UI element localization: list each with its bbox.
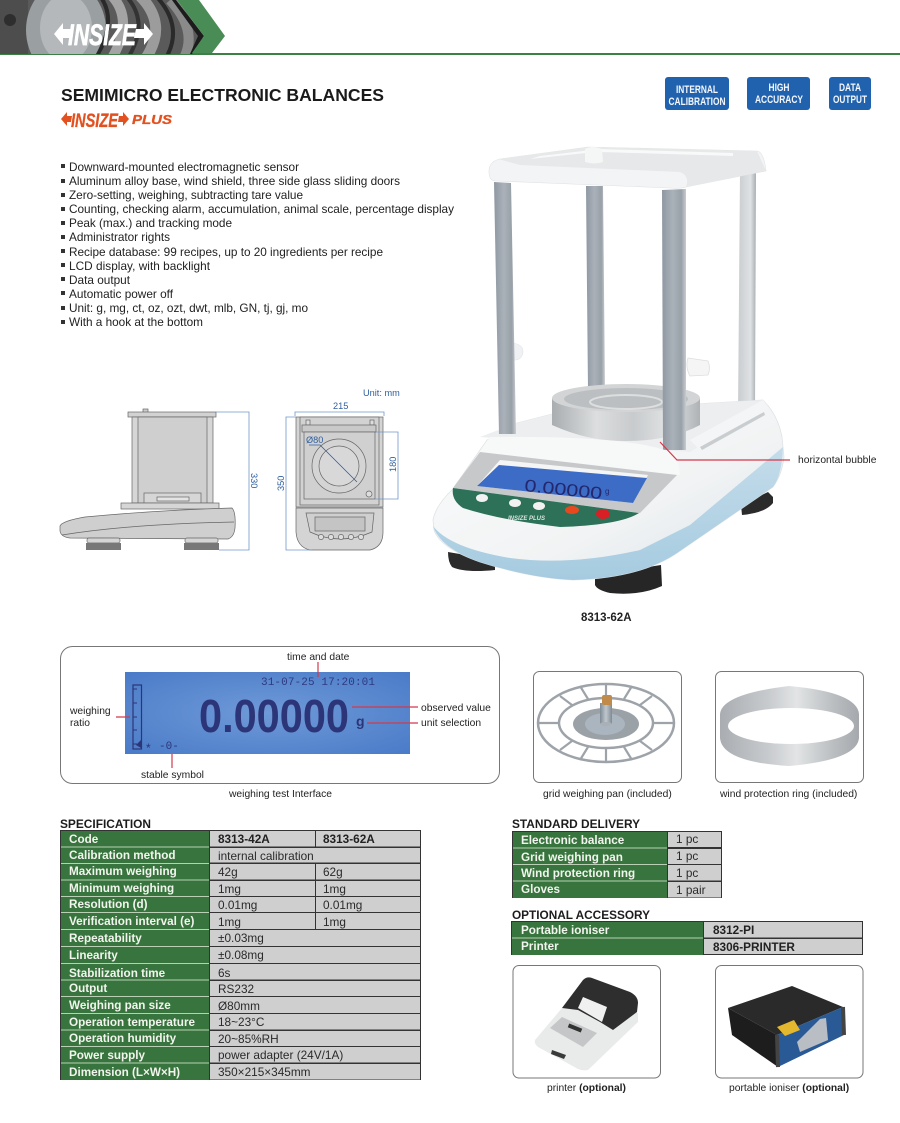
brand logo: INSIZE PLUS [61, 111, 173, 132]
feature list: With a hook at the bottom [69, 315, 203, 329]
table: specification: Operation temperature [69, 1016, 195, 1029]
balance control panel: 0.00000 [524, 476, 603, 503]
table: specification: Code [69, 833, 99, 846]
balance control panel: g [605, 487, 609, 496]
table: specification: 1mg [323, 882, 346, 896]
panel: weighing test interface [60, 646, 500, 784]
LCD screen [125, 672, 410, 755]
interface callouts: time and date [287, 652, 350, 663]
LCD screen: -0- [159, 741, 179, 753]
balance windshield ring [552, 384, 700, 441]
balance control panel [453, 452, 677, 527]
icon: ioniser [728, 986, 844, 1067]
table: specification: power adapter (24V/1A) [218, 1048, 343, 1062]
table: specification: Resolution (d) [69, 898, 148, 911]
panel: wind protection ring [716, 672, 864, 782]
badge: internal calibration [665, 77, 729, 110]
balance base body [433, 182, 784, 594]
caption: grid pan: grid weighing pan (included) [543, 789, 672, 800]
feature list: Unit: g, mg, ct, oz, ozt, dwt, mlb, GN, tj, gj, mo [69, 301, 308, 315]
table: specification: Verification interval (e) [69, 915, 194, 928]
table: specification: internal calibration [218, 849, 314, 863]
icon: ring [720, 686, 859, 766]
feature list: Recipe database: 99 recipes, up to 20 ingredients per recipe [69, 245, 383, 259]
table: standard delivery: 1 pc [676, 832, 698, 846]
interface callouts: ratio [70, 718, 90, 729]
badge: internal calibration: CALIBRATION [668, 96, 726, 108]
heading: specification: SPECIFICATION [60, 817, 151, 831]
product photo: balance 8313-62A [433, 147, 784, 594]
feature list: Peak (max.) and tracking mode [69, 216, 232, 230]
heading: standard delivery: STANDARD DELIVERY [512, 817, 640, 831]
brand logo: INSIZE PLUS: INSIZE [71, 111, 119, 132]
table: specification: Operation humidity [69, 1032, 177, 1045]
dimension lines and labels: Ø80 [306, 435, 323, 445]
table: optional accessory: Printer [521, 940, 559, 953]
brand logo: INSIZE PLUS: PLUS [132, 113, 173, 127]
badge: internal calibration: INTERNAL [676, 84, 718, 96]
feature list: Downward-mounted electromagnetic sensor [69, 160, 299, 174]
header machinery photo [0, 0, 204, 54]
table: specification: Stabilization time [69, 967, 166, 980]
technical drawing: side view [60, 409, 235, 550]
table: specification: RS232 [218, 982, 254, 996]
table: specification: Power supply [69, 1049, 145, 1062]
dimension lines and labels: 330 [249, 473, 259, 488]
LCD screen: g [356, 713, 365, 729]
table: optional accessory: Portable ioniser [521, 924, 610, 937]
table: specification: 0.01mg [323, 898, 362, 912]
table: specification: Calibration method [69, 849, 176, 862]
table: specification: 8313-62A [323, 832, 375, 846]
balance rear posts [586, 170, 756, 415]
header banner [0, 0, 900, 55]
table: standard delivery: 1 pc [676, 866, 698, 880]
table: standard delivery: 1 pair [676, 883, 706, 897]
table: specification [60, 830, 421, 1080]
table: specification: Dimension (L×W×H) [69, 1066, 180, 1079]
feature list: Counting, checking alarm, accumulation, animal scale, percentage display [69, 202, 454, 216]
table: optional accessory: 8312-PI [713, 923, 754, 937]
balance glass door handles [512, 343, 710, 376]
table: optional accessory: 8306-PRINTER [713, 940, 795, 954]
title: SEMIMICRO ELECTRONIC BALANCES [61, 85, 384, 105]
feature list: Zero-setting, weighing, subtracting tare value [69, 188, 303, 202]
balance front posts [494, 182, 686, 450]
table: specification: Linearity [69, 949, 118, 962]
balance top frame [489, 147, 766, 188]
dimension lines and labels: 215 [333, 401, 348, 411]
LCD screen: 0.00000 [199, 690, 349, 742]
table: specification: 18~23°C [218, 1015, 265, 1029]
table: specification: Output [69, 982, 107, 995]
table: specification: 42g [218, 865, 238, 879]
table: specification: 8313-42A [218, 832, 270, 846]
callout: horizontal bubble: horizontal bubble [798, 455, 877, 466]
table: specification: Ø80mm [218, 999, 260, 1013]
caption: ring: wind protection ring (included) [719, 789, 857, 800]
header green chevron [177, 0, 225, 53]
table: optional accessory [511, 921, 863, 955]
feature list: Administrator rights [69, 230, 170, 244]
table: specification: 350×215×345mm [218, 1065, 311, 1079]
heading: optional accessory: OPTIONAL ACCESSORY [512, 908, 650, 922]
feature list: Automatic power off [69, 287, 174, 301]
panel: portable ioniser [716, 966, 863, 1078]
table: standard delivery: 1 pc [676, 849, 698, 863]
balance control panel: INSIZE PLUS [508, 516, 545, 522]
dimension lines and labels: Unit: mm [363, 388, 400, 398]
LCD screen: * [146, 741, 151, 755]
dimension lines and labels: 180 [388, 457, 398, 472]
model label: 8313-62A [581, 612, 632, 624]
callout: horizontal bubble [660, 442, 877, 466]
dimension lines and labels: 350 [276, 476, 286, 491]
table: standard delivery: Gloves [521, 883, 560, 896]
balance feet [448, 492, 773, 594]
badge: high accuracy: HIGH [768, 82, 790, 94]
interface callouts: weighing [69, 706, 111, 717]
table: standard delivery: Wind protection ring [521, 867, 635, 880]
header INSIZE logo: INSIZE [68, 19, 137, 52]
table: specification: Minimum weighing [69, 882, 174, 895]
table: specification: 6s [218, 966, 231, 980]
table: specification: 1mg [323, 915, 346, 929]
caption: printer: printer (optional) [547, 1083, 626, 1094]
caption: interface: weighing test Interface [228, 789, 332, 800]
table: specification: ±0.03mg [218, 931, 264, 945]
icon: printer [535, 977, 638, 1070]
badge: high accuracy [747, 77, 810, 110]
interface callouts: stable symbol [141, 770, 204, 781]
table: specification: 1mg [218, 915, 241, 929]
interface callouts: observed value [421, 703, 491, 714]
icon: grid pan [538, 684, 674, 762]
table: specification: 0.01mg [218, 898, 257, 912]
interface callouts [69, 652, 491, 781]
badge: high accuracy: ACCURACY [755, 94, 803, 106]
feature list: Data output [69, 273, 131, 287]
table: standard delivery [512, 831, 722, 898]
badge: data output [829, 77, 871, 110]
dimension lines and labels [216, 388, 400, 550]
LCD screen: 31-07-25 17:20:01 [261, 677, 375, 689]
table: standard delivery: Electronic balance [521, 834, 625, 847]
badge: data output: DATA [839, 82, 861, 94]
feature list: Aluminum alloy base, wind shield, three side glass sliding doors [69, 174, 400, 188]
table: specification: 1mg [218, 882, 241, 896]
panel: printer [513, 966, 660, 1078]
table: specification: Maximum weighing [69, 865, 177, 878]
feature list [61, 160, 454, 329]
technical drawing: front view [296, 417, 383, 550]
feature list: LCD display, with backlight [69, 259, 211, 273]
panel: grid weighing pan [534, 672, 682, 782]
caption: ioniser: portable ioniser (optional) [729, 1083, 849, 1094]
table: standard delivery: Grid weighing pan [521, 851, 623, 864]
table: specification: Weighing pan size [69, 999, 171, 1012]
table: specification: 20~85%RH [218, 1032, 279, 1046]
interface callouts: unit selection [421, 718, 481, 729]
table: specification: Repeatability [69, 932, 142, 945]
table: specification: 62g [323, 865, 343, 879]
table: specification: ±0.08mg [218, 948, 264, 962]
badge: data output: OUTPUT [833, 94, 867, 106]
